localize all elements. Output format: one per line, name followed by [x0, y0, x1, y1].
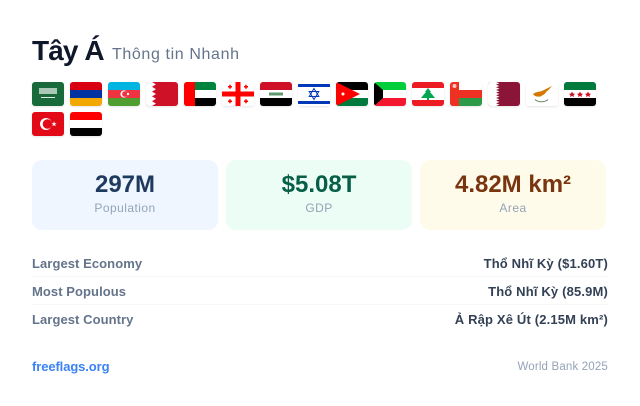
most populous label: Most Populous — [32, 284, 126, 299]
flag: Azerbaijan — [108, 82, 140, 106]
flag: Yemen — [70, 112, 102, 136]
flag: Kuwait — [374, 82, 406, 106]
flag: Georgia — [222, 82, 254, 106]
area label: Area — [499, 201, 527, 215]
flag: Iraq — [260, 82, 292, 106]
flag: Jordan — [336, 82, 368, 106]
stat card: area — [420, 160, 606, 230]
flag: Saudi Arabia — [32, 82, 64, 106]
flag: Lebanon — [412, 82, 444, 106]
population label: Population — [94, 201, 156, 215]
row: most populous — [32, 284, 608, 299]
title: Tây Á — [32, 35, 104, 66]
area value: 4.82M km² — [455, 171, 571, 198]
flag: Oman — [450, 82, 482, 106]
flag: Qatar — [488, 82, 520, 106]
footer link: freeflags.org — [32, 359, 109, 374]
largest economy value: Thổ Nhĩ Kỳ ($1.60T) — [484, 256, 608, 271]
row: largest economy — [32, 256, 608, 271]
flag: Cyprus — [526, 82, 558, 106]
stat card: GDP — [226, 160, 412, 230]
footer source: World Bank 2025 — [517, 361, 608, 373]
flag: Turkey — [32, 112, 64, 136]
largest country value: Ả Rập Xê Út (2.15M km²) — [455, 312, 608, 327]
largest country label: Largest Country — [32, 312, 133, 327]
most populous value: Thổ Nhĩ Kỳ (85.9M) — [488, 284, 608, 299]
largest economy label: Largest Economy — [32, 256, 142, 271]
subtitle: Thông tin Nhanh — [112, 46, 240, 63]
flag: Armenia — [70, 82, 102, 106]
flag: Israel — [298, 82, 330, 106]
flag grid — [32, 82, 596, 138]
flag: Bahrain — [146, 82, 178, 106]
GDP label: GDP — [305, 201, 333, 215]
population value: 297M — [95, 171, 155, 198]
stat card: population — [32, 160, 218, 230]
flag: UAE — [184, 82, 216, 106]
row: largest country — [32, 312, 608, 327]
flag: Syria — [564, 82, 596, 106]
GDP value: $5.08T — [282, 171, 356, 198]
